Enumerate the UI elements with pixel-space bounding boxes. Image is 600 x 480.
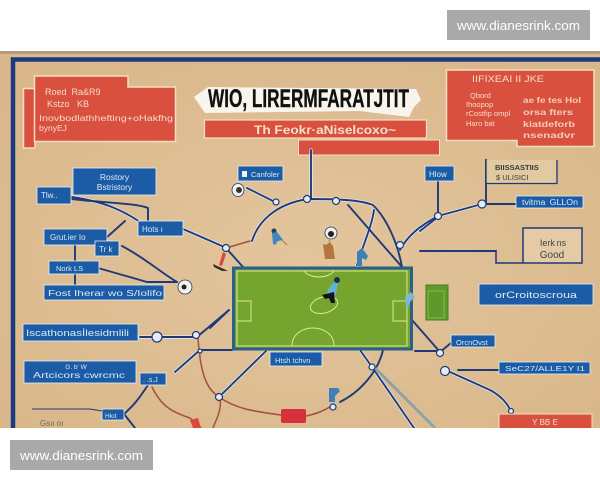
blue figure at pitch edge bbox=[405, 292, 415, 308]
panel: top-right red note: IIFIXEAI II JKE bbox=[472, 74, 544, 85]
label: Rostory bbox=[73, 168, 156, 195]
panel: top-right red note: kiatdeforb bbox=[523, 120, 575, 129]
label: Iscathonas bbox=[23, 324, 138, 341]
label: Feat: Fost Iherar wo S/Iolifo bbox=[48, 289, 163, 298]
connector nodes bbox=[152, 196, 514, 414]
label: Hut bbox=[102, 409, 124, 420]
label: Briefing card: BIISSASTIIS bbox=[495, 163, 539, 172]
panel: top-left red note: bynyEJ bbox=[39, 123, 67, 133]
small green goal panel bbox=[426, 285, 448, 320]
icon: figure blue upper bbox=[272, 228, 287, 245]
label: Hlow: Hlow bbox=[429, 170, 447, 179]
label: Tips: Tlw.. bbox=[41, 191, 57, 200]
label: with action bbox=[516, 196, 583, 208]
panel: top-left red note: Roed Ra&R9 bbox=[45, 87, 101, 97]
label: Hlow bbox=[425, 166, 454, 181]
panel: top-right red note: ae fe tes Hol bbox=[523, 96, 581, 105]
label: Rostory: Rostory bbox=[100, 172, 130, 182]
grey diagonal line bbox=[375, 368, 435, 428]
label: with action: tvitma GLLOn bbox=[522, 198, 578, 207]
label: Gruter Io: Grut.ier Io bbox=[50, 233, 86, 242]
label: orCroitoscroua bbox=[479, 284, 593, 305]
tan poster background bbox=[0, 51, 600, 428]
icon: ball upper bbox=[325, 227, 337, 239]
panel: top-right red note: Ihoopop bbox=[466, 100, 493, 109]
label: Antennas: G. b' W bbox=[65, 364, 88, 371]
icon: ball upper left bbox=[232, 184, 244, 196]
label: dots: . .s.J bbox=[143, 377, 158, 384]
poster frame bbox=[13, 60, 600, 428]
label: Orcnovst: OrcnOvst bbox=[456, 338, 489, 347]
icon: red figure bbox=[213, 252, 228, 271]
panel: top-right red note: Qbord bbox=[470, 91, 491, 100]
panel: top-left red note: Inovbodlathhefting+oHakfhg bbox=[39, 113, 173, 123]
label line left bbox=[32, 409, 102, 411]
panel: bottom-right red note bbox=[499, 414, 592, 428]
watermark top right bbox=[447, 10, 590, 40]
panel: top-right red note bbox=[446, 70, 594, 146]
label: Tip: Tr k bbox=[99, 245, 113, 254]
label: pitch caption: Htsh tchvn bbox=[275, 356, 310, 365]
panel: top-right red note: orsa fters bbox=[523, 108, 574, 117]
icon: brown figure bbox=[323, 240, 335, 259]
connector network: light halo bbox=[72, 150, 511, 428]
red pill bbox=[281, 409, 306, 423]
label: Good card: Good bbox=[540, 250, 564, 261]
subtitle red bar: Th Feokr·aNiselcoxo~ bbox=[254, 125, 396, 137]
subtitle red bar bbox=[204, 120, 426, 138]
watermark top right: www.dianesrink.com bbox=[456, 18, 580, 33]
label: Work: Nork LS bbox=[56, 264, 83, 273]
label: Hosts: Hots ı bbox=[142, 225, 163, 234]
caption: grey note: Gsıı oı bbox=[40, 419, 64, 428]
label: Tip bbox=[95, 241, 119, 256]
icon: blue figure bottom bbox=[329, 388, 340, 402]
second red bar bbox=[298, 140, 440, 155]
watermark bottom left bbox=[10, 440, 153, 470]
label: Feat bbox=[44, 285, 164, 300]
panel: top-right red note: rCostfip ompl bbox=[466, 109, 511, 118]
title banner: WIO, LIRERMFARATJTIT bbox=[208, 85, 409, 113]
icon: ball left bbox=[178, 280, 192, 294]
label: Antennas: Artcicors cwrcmc bbox=[33, 371, 125, 380]
white area below poster bbox=[0, 428, 600, 480]
panel: top-right red note: Haro bat bbox=[466, 119, 496, 128]
label: orCroitoscroua: orCroitoscroua bbox=[495, 290, 578, 301]
panel: football pitch bbox=[234, 268, 412, 349]
label: Caution: Canfoler bbox=[251, 170, 280, 179]
panel: bottom-right red note: Y BB E bbox=[532, 418, 558, 427]
label: Gruter Io bbox=[44, 229, 107, 245]
connector network: navy lines bbox=[72, 150, 516, 428]
label: Hosts bbox=[138, 221, 183, 236]
label: Briefing card: $ ULISICI bbox=[496, 173, 529, 182]
icon: blue figure right bbox=[357, 248, 368, 266]
label: pitch caption bbox=[270, 352, 322, 366]
label: strategy bar: SeC27/ALLE1Y I1 bbox=[505, 364, 585, 373]
label: Orcnovst bbox=[451, 335, 495, 347]
label: Iscathonas: Iscathonasİlesidmlili bbox=[26, 328, 129, 338]
label: Briefing card bbox=[486, 159, 557, 184]
label: Hut: Hkıt bbox=[105, 413, 117, 420]
panel: top-right red note: nsenadvr bbox=[523, 131, 575, 140]
label: strategy bar bbox=[499, 362, 590, 374]
label: Rostory: Bstristory bbox=[97, 182, 133, 192]
label: Tips bbox=[37, 187, 71, 204]
icon: player on pitch bbox=[322, 277, 340, 303]
label: Antennas bbox=[24, 361, 136, 383]
label: Good card bbox=[496, 228, 582, 263]
label: Work bbox=[49, 261, 99, 274]
label: dots bbox=[140, 373, 166, 385]
title banner bbox=[194, 85, 421, 117]
panel: top-left red note bbox=[24, 76, 176, 148]
connector network: red-brown lines bbox=[152, 241, 333, 428]
icon: red figure bottom bbox=[190, 418, 201, 428]
label: Good card: Ierk ns bbox=[540, 238, 567, 248]
label: Caution bbox=[238, 166, 283, 181]
watermark bottom left: www.dianesrink.com bbox=[19, 448, 143, 463]
panel: top-left red note: Kstzo KB bbox=[47, 99, 89, 109]
